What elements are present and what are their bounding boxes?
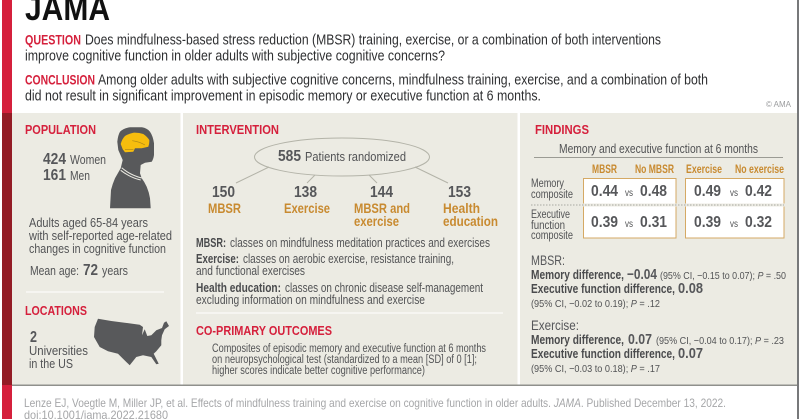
arm: health education: education (443, 213, 498, 229)
conclusion: Among older adults with subjective cognitive concerns, mindfulness training, exercise, and a combination of both (98, 72, 708, 88)
left red bar (2, 0, 12, 419)
randomization ellipse (254, 138, 430, 176)
women count: 424 (43, 151, 66, 168)
MBSR results: 0.08 (678, 281, 703, 297)
definition: MBSR: classes on mindfulness meditation practices and exercises (230, 236, 490, 250)
box: exercise values: vs (730, 219, 738, 230)
column headers: No exercise (735, 164, 784, 176)
arm: exercise: 138 (294, 184, 317, 201)
row label: memory composite: composite (531, 189, 573, 201)
MBSR results: (95% CI, −0.02 to 0.19); P = .12 (531, 298, 660, 310)
arm: MBSR (208, 184, 241, 216)
box: MBSR values: 0.39 (591, 214, 618, 231)
outcomes description: higher scores indicate better cognitive performance) (212, 365, 425, 377)
women count: Women (70, 153, 106, 167)
MBSR results: −0.04 (627, 267, 657, 283)
MBSR results: Executive function difference, (531, 282, 675, 296)
mean age: 72 (83, 262, 98, 279)
population description: changes in cognitive function (29, 242, 166, 256)
conclusion: CONCLUSION (25, 72, 95, 88)
locations text (29, 329, 88, 371)
exercise results: Exercise: (531, 317, 579, 333)
men count: 161 (43, 167, 66, 184)
definition: exercise: classes on aerobic exercise, resistance training, (243, 252, 454, 266)
definition: exercise: Exercise: (196, 252, 239, 266)
box: exercise values: 0.42 (745, 183, 772, 200)
question: QUESTION (25, 32, 81, 48)
outcomes description: Composites of episodic memory and executive function at 6 months (212, 343, 486, 355)
box: MBSR values (584, 178, 676, 238)
definition: exercise: and functional exercises (196, 264, 305, 278)
box: exercise values: 0.49 (694, 183, 721, 200)
box: MBSR values: vs (625, 188, 633, 199)
exercise results: 0.07 (678, 346, 703, 362)
MBSR results: (95% CI, −0.15 to 0.07); P = .50 (660, 270, 786, 282)
exercise results: (95% CI, −0.03 to 0.18); P = .17 (531, 363, 660, 375)
box: MBSR values: 0.44 (591, 183, 618, 200)
column headers: MBSR (592, 164, 618, 176)
exercise results: 0.07 (628, 332, 652, 348)
mean age: Mean age: (30, 264, 79, 278)
exercise results: (95% CI, −0.04 to 0.17); P = .23 (656, 335, 784, 347)
column headers (592, 164, 784, 176)
outcomes description (212, 343, 486, 377)
exercise results (531, 317, 784, 375)
arm: exercise: Exercise (284, 200, 330, 216)
arm: MBSR: MBSR (208, 200, 241, 216)
locations text: 2 (30, 329, 37, 346)
box: exercise values: 0.32 (745, 214, 772, 231)
arm: health education: 153 (448, 184, 471, 201)
MBSR results: MBSR: (531, 252, 565, 268)
randomization ellipse: 585 (278, 148, 301, 165)
row label: executive function composite: function (531, 220, 565, 232)
arm: MBSR and exercise (354, 184, 410, 229)
question (25, 32, 661, 64)
icon: head with brain (110, 127, 154, 208)
row label: memory composite (531, 178, 573, 201)
row label: executive function composite: Executive (531, 209, 570, 221)
MBSR results: Memory difference, (531, 268, 624, 282)
men count: Men (70, 169, 90, 183)
definition: health education (196, 281, 483, 307)
arm: exercise (284, 184, 330, 216)
box: exercise values: vs (730, 188, 738, 199)
MBSR results (531, 252, 786, 310)
box: exercise values: 0.39 (694, 214, 721, 231)
citation (24, 396, 726, 419)
locations text: in the US (29, 357, 73, 371)
population description: Adults aged 65-84 years (29, 216, 148, 230)
arm: MBSR and exercise: exercise (354, 213, 399, 229)
arm: MBSR and exercise: 144 (370, 184, 393, 201)
mean age: years (102, 264, 128, 278)
arm: MBSR: 150 (212, 184, 235, 201)
definition: health education: excluding information on mindfulness and exercise (196, 293, 425, 307)
heading: findings: FINDINGS (535, 123, 589, 137)
heading: co-primary outcomes: CO-PRIMARY OUTCOMES (196, 324, 332, 338)
panel: findings (520, 113, 797, 385)
women count (43, 151, 106, 168)
column headers: No MBSR (635, 164, 675, 176)
conclusion (25, 72, 708, 104)
panel: intervention (183, 113, 518, 385)
connector lines (236, 167, 448, 183)
exercise results: Executive function difference, (531, 347, 675, 361)
box: MBSR values: 0.31 (640, 214, 667, 231)
mean age (30, 262, 128, 279)
question: Does mindfulness-based stress reduction (MBSR) training, exercise, or a combination of both interventions (85, 32, 661, 48)
conclusion: did not result in significant improvement in episodic memory or executive function at 6 months. (25, 88, 541, 104)
heading: locations: LOCATIONS (25, 304, 87, 318)
arm: health education: Health (443, 200, 480, 216)
definition: health education: classes on chronic disease self-management (285, 281, 483, 295)
locations text: Universities (29, 344, 88, 358)
right border (797, 0, 799, 419)
panel: population and locations (2, 113, 180, 385)
box: MBSR values: 0.48 (640, 183, 667, 200)
column headers: Exercise (686, 164, 722, 176)
icon: US map (94, 319, 169, 365)
definition: health education: Health education: (196, 281, 281, 295)
outcomes description: on neuropsychological test (standardized to a mean [SD] of 0 [1]; (212, 354, 477, 366)
population description: with self-reported age-related (28, 229, 172, 243)
copyright: © AMA (766, 99, 791, 109)
row label: memory composite: Memory (531, 178, 564, 190)
population description (28, 216, 172, 256)
arm: MBSR and exercise: MBSR and (354, 200, 410, 216)
exercise results: Memory difference, (531, 333, 624, 347)
definition: MBSR: MBSR: (196, 236, 226, 250)
box: exercise values (686, 178, 784, 238)
row label: executive function composite: composite (531, 230, 573, 242)
men count (43, 167, 90, 184)
box: MBSR values: vs (625, 219, 633, 230)
table title: Memory and executive function at 6 months (559, 142, 758, 156)
definition: exercise (196, 252, 454, 278)
heading: intervention: INTERVENTION (196, 123, 279, 137)
randomization ellipse: Patients randomized (305, 150, 406, 164)
question: improve cognitive function in older adults with subjective cognitive concerns? (25, 48, 445, 64)
citation: Lenze EJ, Voegtle M, Miller JP, et al. Effects of mindfulness training and exercise on cognitive function in older adults. JAMA. Published December 13, 2022. (24, 396, 726, 410)
row label: executive function composite (531, 209, 573, 242)
arm: health education (443, 184, 498, 229)
heading: population: POPULATION (25, 123, 96, 137)
